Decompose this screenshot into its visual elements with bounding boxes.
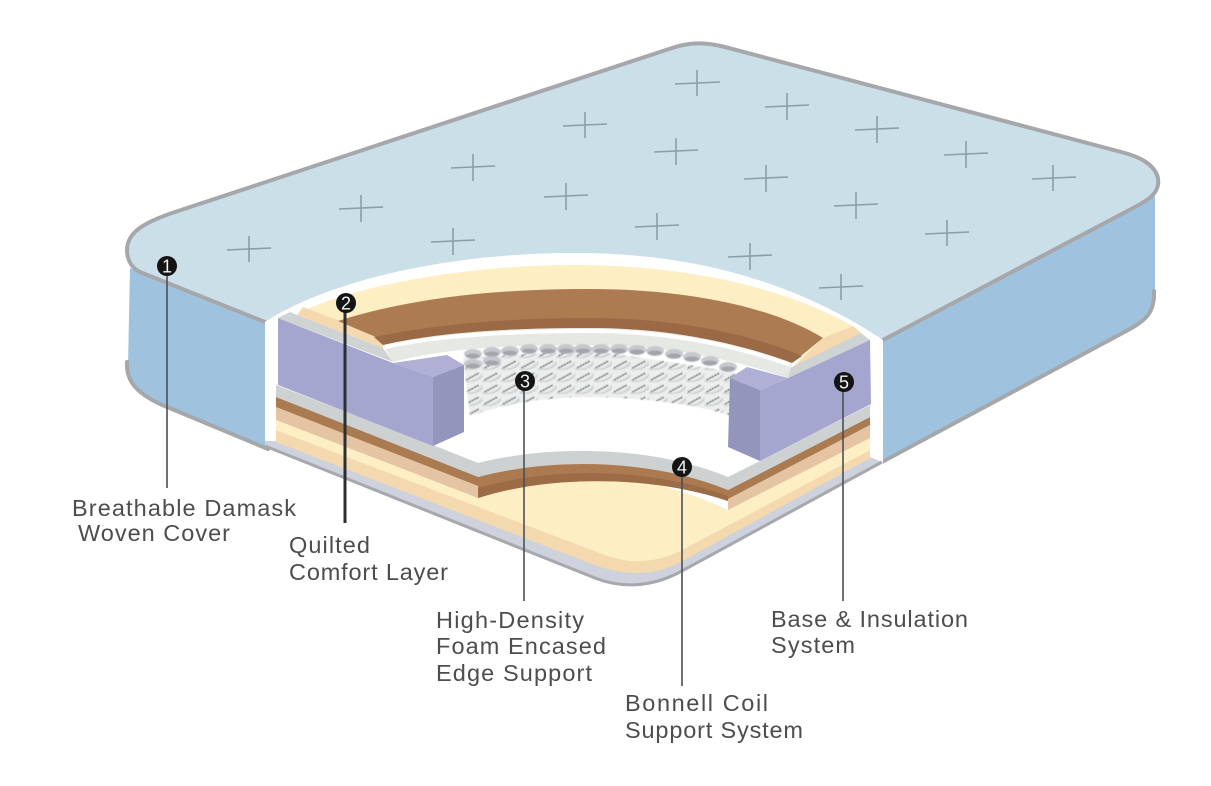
callout 5 leader — [834, 372, 854, 601]
ceiling underside highlight — [385, 331, 790, 365]
base outline — [265, 446, 882, 585]
tan layer — [276, 407, 870, 510]
label: foam edge — [436, 607, 606, 686]
coil top shading — [466, 348, 735, 372]
callout 1 leader: 1 — [162, 256, 172, 276]
label: base system — [771, 606, 968, 658]
label: coil system — [625, 690, 803, 743]
coil tops — [464, 344, 737, 372]
mattress outline — [127, 43, 1158, 462]
ceiling brown layer — [338, 289, 823, 363]
left foam block — [278, 318, 464, 446]
callout 4 leader: 4 — [677, 458, 687, 478]
white cut-away opening — [265, 253, 883, 570]
label: comfort layer — [289, 532, 448, 585]
quilting tufts — [227, 70, 1076, 300]
front brown arc — [478, 464, 728, 501]
label: coil system: Bonnell Coil — [625, 690, 768, 716]
gray wall layer — [276, 385, 870, 490]
base gray layer — [265, 441, 882, 585]
brown wall layer — [276, 397, 870, 499]
left side panel — [128, 268, 268, 449]
label: base system: Base & Insulation — [771, 606, 968, 632]
label: foam edge: Foam Encased — [436, 633, 606, 659]
callout 2 leader: 2 — [341, 294, 351, 314]
ceiling underside — [383, 328, 792, 378]
ceiling peach strip — [297, 307, 861, 368]
label: cover: Woven Cover — [78, 520, 230, 546]
ceiling brown shade — [374, 318, 802, 363]
ceiling gray strip — [278, 312, 870, 378]
ceiling cream layer — [302, 265, 853, 363]
callout 3 leader: 3 — [520, 372, 530, 392]
right foam block — [728, 340, 871, 461]
label: foam edge: Edge Support — [436, 660, 592, 686]
front brown arc shade — [478, 473, 728, 501]
top surface — [127, 43, 1158, 340]
callout 3 leader — [515, 371, 535, 601]
label: foam edge: High-Density — [436, 607, 584, 633]
callout 5 leader: 5 — [839, 372, 849, 392]
label: cover: Breathable Damask — [72, 495, 296, 521]
callout 1 leader — [157, 256, 177, 488]
right side panel — [880, 196, 1155, 463]
label: coil system: Support System — [625, 717, 803, 743]
cream foam floor — [276, 420, 870, 561]
callout 2 leader — [336, 293, 356, 523]
spring field — [463, 344, 737, 417]
label: comfort layer: Comfort Layer — [289, 559, 448, 585]
peach layer — [276, 430, 870, 573]
label: comfort layer: Quilted — [289, 532, 370, 558]
callout 4 leader — [672, 457, 692, 686]
front gray arc — [478, 451, 728, 490]
label: base system: System — [771, 632, 855, 658]
label: cover — [72, 495, 296, 546]
